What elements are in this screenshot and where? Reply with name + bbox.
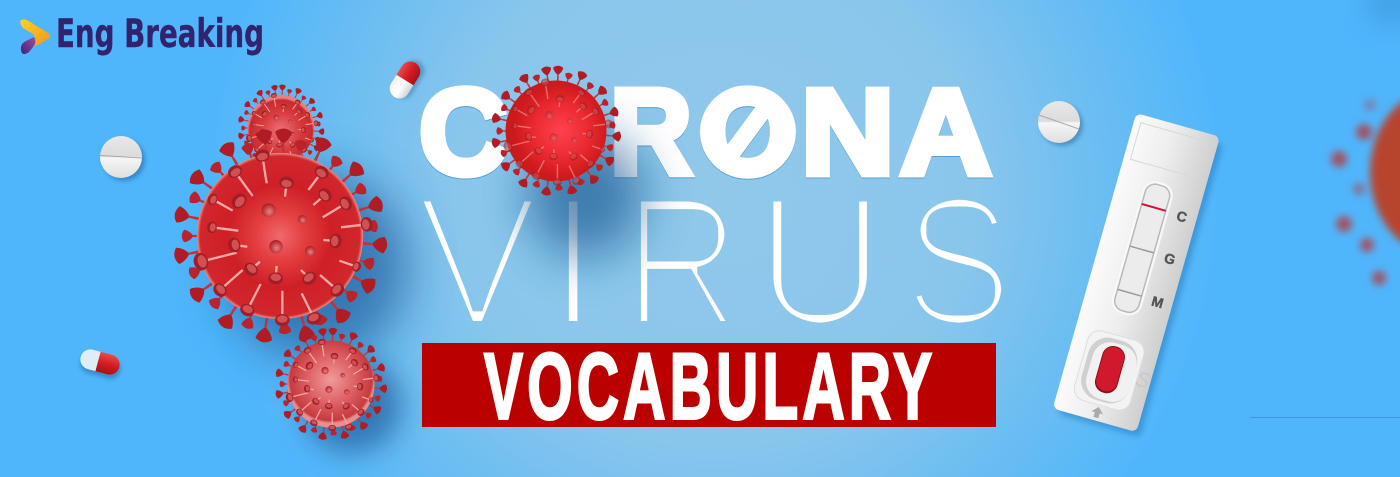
thin horizontal line bottom right [1250,417,1400,418]
title: VIRUS: I [547,160,599,363]
title: CORONA [420,85,994,180]
title: CORONA: R [610,63,692,200]
virus: title [491,66,621,196]
kit letters C G M: M [1150,293,1165,311]
result window [1109,178,1176,318]
virus: top small [238,84,325,172]
kit letters C G M: C [1175,207,1189,225]
capsule top [386,55,428,104]
virus shadow: title [527,133,643,257]
tablet left [100,136,145,181]
virus shadow: small bottom [302,357,402,453]
title: VIRUS: U [755,160,885,363]
sample letter S: S [1133,367,1153,393]
logo: Eng Breaking [20,12,264,57]
test kit [1052,113,1225,437]
soft shadow top right corner [1366,0,1400,26]
title: CORONA: A [900,64,992,200]
title: CORONA: Ø [698,64,798,200]
logo wordmark: Eng Breaking [56,12,264,57]
virus: large left [173,128,388,344]
virus: small bottom [275,328,387,440]
title: VIRUS: V [416,159,539,363]
title: CORONA: C [419,64,507,200]
capsule bottom left [77,347,124,381]
banner: VOCABULARY [422,333,996,439]
banner text: VOCABULARY [484,333,936,439]
label area [1130,123,1208,178]
title: VIRUS: S [903,159,1013,363]
tablet right [1038,101,1083,146]
title: CORONA: N [801,63,894,200]
small arrow [1090,405,1105,419]
title: VIRUS [416,159,1013,363]
logo icon [20,20,50,54]
kit letters C G M: G [1162,250,1177,268]
sample well [1071,328,1147,413]
blurred virus at right edge [1331,88,1400,285]
title: VIRUS: R [623,159,741,363]
kit letters C G M [1150,207,1190,311]
virus shadow: big [224,172,408,360]
